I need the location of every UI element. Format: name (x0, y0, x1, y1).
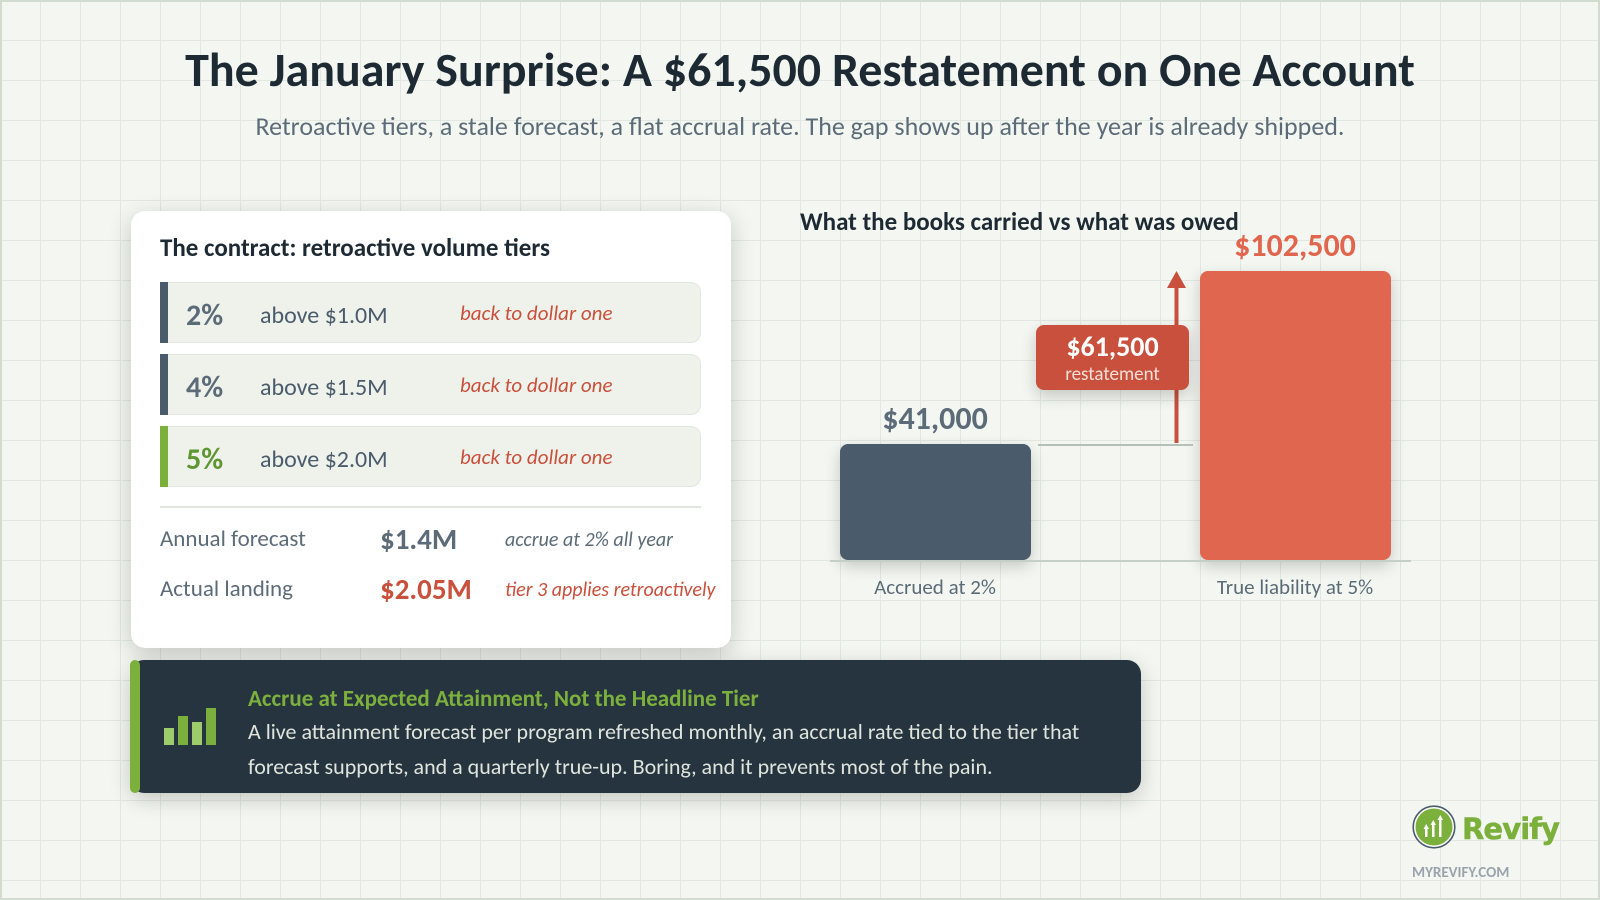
website: MYREVIFY.COM (1412, 864, 1509, 882)
panel heading: The contract: retroactive volume tiers (160, 232, 550, 263)
tier row 5%: 5% (186, 441, 223, 478)
callout (130, 660, 1141, 793)
logo (1412, 805, 1560, 882)
chart heading: What the books carried vs what was owed (800, 206, 1239, 237)
tier row 5%: above $2.0M (260, 445, 388, 474)
label: true liability: True liability at 5% (1217, 574, 1373, 600)
chart baseline (830, 560, 1411, 562)
callout heading: Accrue at Expected Attainment, Not the Headline Tier (248, 685, 759, 713)
subtitle: Retroactive tiers, a stale forecast, a flat accrual rate. The gap shows up after the year is already shipped. (256, 110, 1344, 142)
tier row 2%: back to dollar one (460, 300, 612, 326)
wordmark: Revify (1462, 812, 1559, 846)
tier row 5% (160, 426, 701, 487)
badge: restatement: restatement (1065, 363, 1160, 386)
callout body: A live attainment forecast per program refreshed monthly, an accrual rate tied to the tier that (248, 718, 1079, 745)
tier row 4%: above $1.5M (260, 373, 388, 402)
divider (160, 506, 701, 508)
actual row: $2.05M (380, 571, 472, 607)
title: The January Surprise: A $61,500 Restatement on One Account (185, 40, 1415, 99)
icon: logo mark (1412, 805, 1456, 849)
value: 102,500: $102,500 (1234, 226, 1356, 265)
reference line (1038, 444, 1193, 446)
tier row 2%: above $1.0M (260, 301, 388, 330)
badge: restatement (1036, 325, 1189, 390)
actual row (160, 571, 716, 607)
badge: restatement: $61,500 (1066, 329, 1159, 364)
tier row 4% (160, 354, 701, 415)
forecast row (160, 521, 674, 557)
tier row 4%: 4% (186, 369, 223, 406)
icon: bars (164, 708, 216, 745)
bar: true liability (1200, 271, 1391, 560)
forecast row: $1.4M (380, 521, 457, 557)
arrow (1167, 271, 1186, 443)
forecast row: accrue at 2% all year (505, 528, 673, 552)
callout accent (130, 660, 140, 793)
tier row 5%: back to dollar one (460, 444, 612, 470)
bar: accrued (840, 444, 1031, 560)
callout body: forecast supports, and a quarterly true-up. Boring, and it prevents most of the pain. (248, 753, 993, 780)
tier row 4%: back to dollar one (460, 372, 612, 398)
label: accrued: Accrued at 2% (874, 574, 996, 600)
tier row 2%: 2% (186, 297, 223, 334)
forecast row: Annual forecast (160, 525, 306, 553)
actual row: Actual landing (160, 575, 293, 603)
actual row: tier 3 applies retroactively (505, 578, 715, 602)
callout body (248, 718, 1079, 780)
value: 41,000: $41,000 (882, 399, 988, 438)
tier row 2% (160, 282, 701, 343)
panel: contract tiers (131, 211, 731, 648)
